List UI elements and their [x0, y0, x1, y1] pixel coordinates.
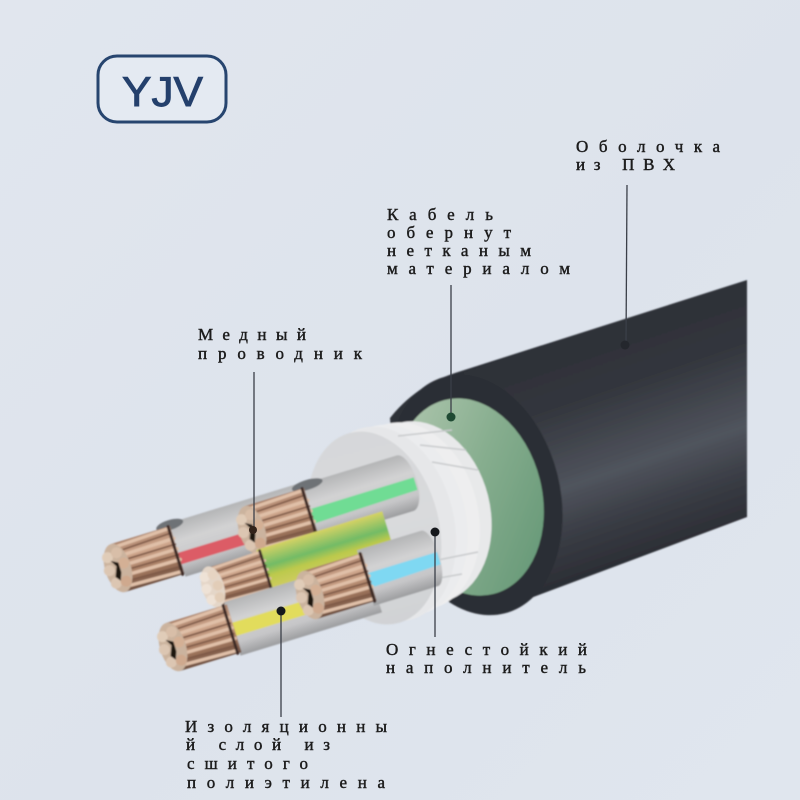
label: non-woven wrap	[387, 205, 570, 278]
conductor: blue	[288, 528, 448, 627]
label: PVC sheath	[576, 137, 720, 174]
label: fire-resistant filler: Огнестойкий	[386, 640, 587, 659]
label: XLPE insulation	[185, 717, 388, 792]
conductor: red	[95, 478, 322, 599]
outer PVC jacket	[363, 280, 747, 634]
label: PVC sheath: из ПВХ	[576, 155, 675, 174]
leader: copper conductor	[249, 372, 257, 534]
label: fire-resistant filler	[386, 640, 587, 677]
label: XLPE insulation: й слой из	[186, 735, 330, 754]
label: XLPE insulation: полиэтилена	[187, 773, 385, 792]
conductor: yellow-green	[195, 511, 396, 612]
label: non-woven wrap: обернут	[387, 223, 512, 242]
label: fire-resistant filler: наполнитель	[386, 658, 586, 677]
cable illustration	[95, 280, 747, 678]
leader: non-woven wrap	[446, 285, 456, 422]
label: PVC sheath: Оболочка	[576, 137, 720, 156]
label: XLPE insulation: Изоляционны	[185, 717, 388, 736]
leader: filler	[430, 528, 440, 637]
conductor: yellow	[151, 559, 382, 678]
conductor: green	[229, 449, 425, 562]
badge: YJV	[98, 56, 226, 122]
label: non-woven wrap: материалом	[387, 259, 570, 278]
leader: PVC sheath	[620, 185, 630, 350]
label: XLPE insulation: сшитого	[187, 754, 308, 773]
label: non-woven wrap: нетканым	[387, 241, 531, 260]
fire-resistant filler	[287, 406, 510, 639]
badge: YJV: YJV	[122, 68, 203, 115]
label: copper conductor	[198, 325, 363, 363]
label: copper conductor: проводник	[198, 344, 363, 363]
label: non-woven wrap: Кабель	[387, 205, 493, 224]
leader: insulation	[276, 606, 286, 717]
non-woven wrap	[374, 382, 564, 612]
label: copper conductor: Медный	[198, 325, 306, 344]
